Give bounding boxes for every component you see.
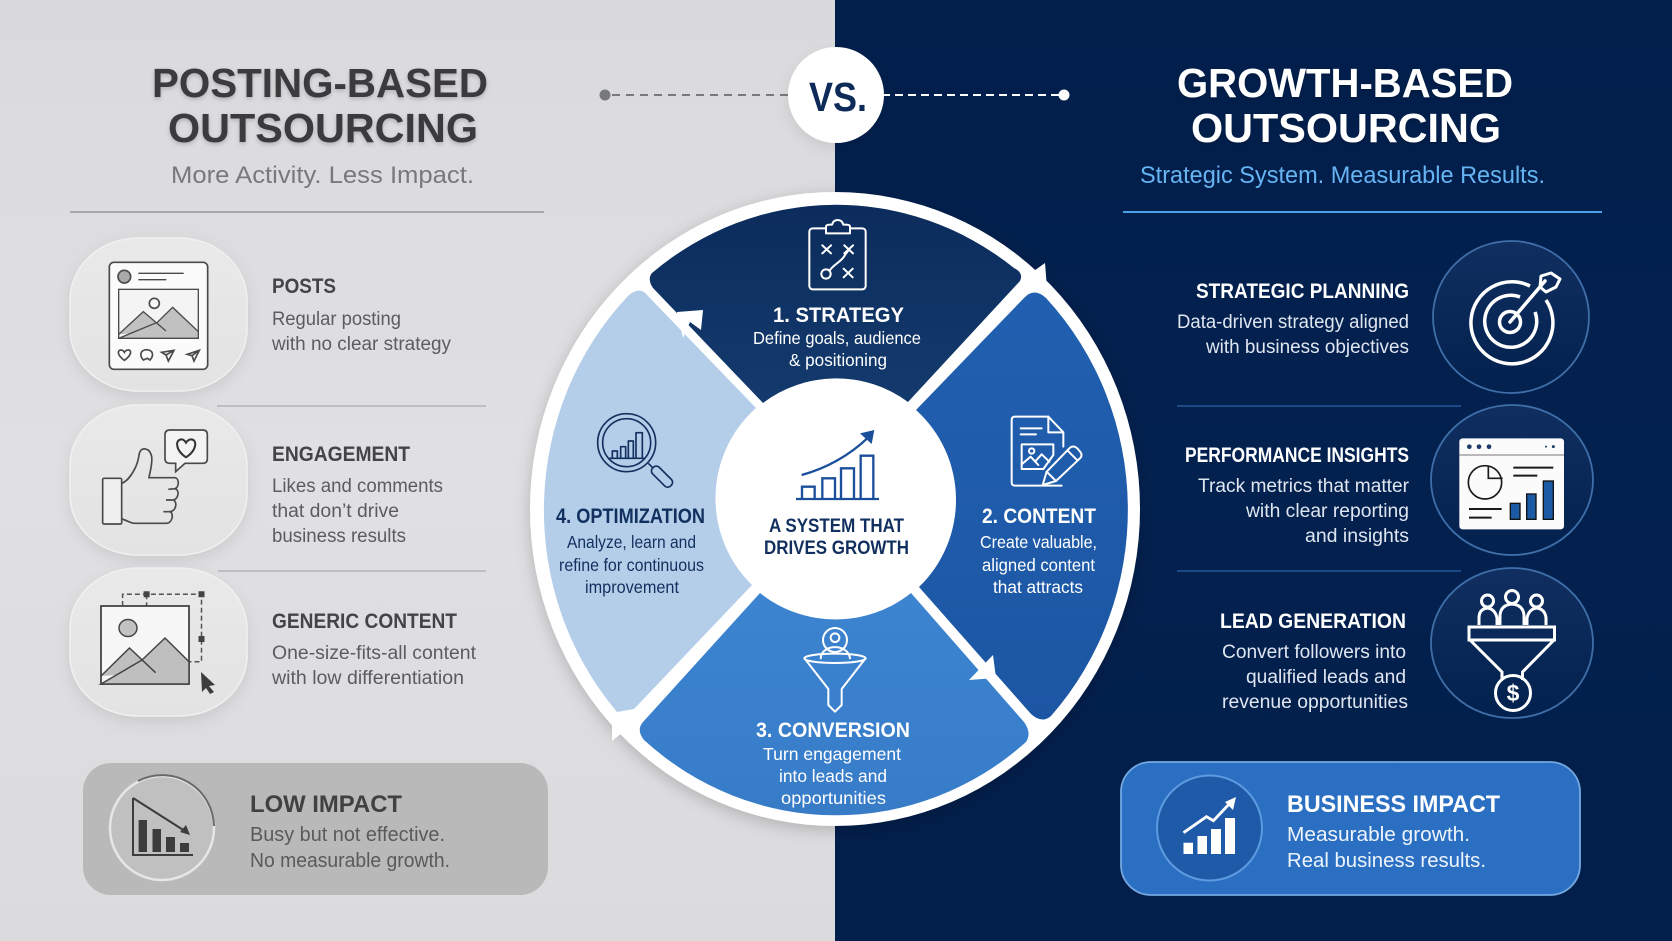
text: performance insights: and insights: [1305, 526, 1409, 547]
text: conversion: [756, 719, 910, 808]
text: conversion: opportunities: [781, 788, 886, 808]
text: performance insights: [1185, 444, 1410, 547]
row: engagement: [70, 405, 443, 555]
heading: growth-based outsourcing: OUTSOURCING: [1191, 105, 1501, 151]
text: optimization: Analyze, learn and: [567, 532, 696, 552]
text: generic content: GENERIC CONTENT: [272, 610, 457, 633]
text: optimization: refine for continuous: [559, 555, 704, 575]
heading: posting-based outsourcing: OUTSOURCING: [168, 105, 478, 151]
text: posts: with no clear strategy: [271, 334, 451, 355]
text: strategic planning: [1177, 280, 1409, 358]
text: conversion: 3. CONVERSION: [756, 719, 910, 742]
arrow: strategy to content: [1024, 263, 1047, 288]
text: lead generation: [1220, 610, 1408, 713]
subtitle: left: More Activity. Less Impact.: [171, 162, 474, 189]
segment: 2 content: [916, 292, 1128, 720]
text: engagement: [272, 443, 443, 547]
text: conversion: Turn engagement: [763, 744, 901, 764]
left panel background: [0, 0, 836, 941]
row: performance insights: [1185, 405, 1593, 555]
text: engagement: business results: [272, 526, 406, 547]
text: a system that drives growth: DRIVES GROWTH: [764, 538, 909, 559]
segment: 1 strategy: [650, 205, 1021, 403]
text: posts: [271, 275, 451, 355]
text: low impact: LOW IMPACT: [250, 791, 402, 818]
text: lead generation: LEAD GENERATION: [1220, 610, 1406, 633]
heading: growth-based outsourcing: [1177, 60, 1513, 151]
text: content: aligned content: [982, 555, 1095, 575]
heading: posting-based outsourcing: POSTING-BASED: [152, 60, 488, 106]
vs connector right: [882, 90, 1070, 100]
text: content: [980, 505, 1097, 597]
text: strategy: [753, 304, 921, 370]
center hub: [718, 382, 954, 618]
arrow: conversion to optimization: [612, 716, 628, 741]
text: strategic planning: STRATEGIC PLANNING: [1196, 280, 1409, 303]
icon: analytics dashboard window: [1431, 405, 1593, 555]
text: content: that attracts: [993, 577, 1083, 597]
text: performance insights: Track metrics that matter: [1198, 476, 1410, 497]
icon: rising bar chart: [1157, 776, 1262, 880]
text: content: Create valuable,: [980, 532, 1097, 552]
text: engagement: ENGAGEMENT: [272, 443, 410, 466]
callout: business impact: [1121, 762, 1580, 895]
icon: thumbs up with heart bubble: [70, 405, 247, 555]
row: posts: [70, 238, 451, 391]
text: optimization: [556, 505, 705, 597]
text: lead generation: qualified leads and: [1246, 667, 1406, 688]
text: engagement: Likes and comments: [272, 476, 443, 497]
circular diagram: system that drives growth: [530, 192, 1140, 826]
arrow: content to conversion: [969, 655, 996, 680]
text: lead generation: Convert followers into: [1222, 642, 1406, 663]
text: a system that drives growth: [764, 516, 909, 559]
icon: social post card: [70, 238, 247, 391]
arrow: optimization to strategy: [677, 310, 703, 338]
text: optimization: 4. OPTIMIZATION: [556, 505, 705, 528]
text: business impact: Measurable growth.: [1287, 824, 1470, 846]
vs connector left: [600, 90, 790, 100]
row: strategic planning: [1177, 241, 1589, 393]
text: strategy: Define goals, audience: [753, 328, 921, 348]
icon: generic image with cursor: [70, 568, 247, 716]
text: a system that drives growth: A SYSTEM THAT: [769, 516, 904, 537]
icon: magnifier with bars: [598, 414, 674, 489]
text: business impact: Real business results.: [1287, 850, 1486, 872]
text: lead generation: revenue opportunities: [1222, 692, 1408, 713]
text: engagement: that don’t drive: [272, 501, 399, 522]
segment: 3 conversion: [640, 593, 1029, 815]
icon: people funnel with dollar: [1431, 568, 1593, 718]
icon: clipboard playbook: [809, 220, 866, 289]
text: content: 2. CONTENT: [982, 505, 1096, 528]
text: business impact: [1287, 791, 1500, 872]
segment: 4 optimization: [544, 290, 756, 712]
text: business impact: BUSINESS IMPACT: [1287, 791, 1500, 818]
text: optimization: improvement: [585, 577, 679, 597]
text: low impact: [250, 791, 450, 872]
icon: growth chart: [796, 430, 879, 499]
vs badge: [788, 47, 884, 143]
icon: people funnel with dollar: $: [1507, 680, 1520, 706]
icon: conversion funnel: [804, 628, 866, 712]
vs badge: VS.: [809, 74, 867, 120]
icon: declining bar chart: [110, 775, 214, 880]
callout: low impact: [83, 763, 548, 895]
icon: target with arrow: [1433, 241, 1589, 393]
text: conversion: into leads and: [779, 766, 887, 786]
text: performance insights: with clear reporting: [1245, 501, 1409, 522]
text: posts: POSTS: [272, 275, 336, 298]
right panel background: [835, 0, 1672, 941]
text: strategic planning: Data-driven strategy aligned: [1177, 312, 1409, 333]
heading: growth-based outsourcing: GROWTH-BASED: [1177, 60, 1513, 106]
row: lead generation: [1220, 568, 1593, 718]
text: strategy: & positioning: [789, 350, 887, 370]
text: low impact: No measurable growth.: [250, 850, 450, 872]
text: strategic planning: with business objectives: [1205, 337, 1409, 358]
text: generic content: [271, 610, 477, 689]
subtitle: right: Strategic System. Measurable Results.: [1140, 162, 1545, 189]
heading: posting-based outsourcing: [152, 60, 488, 151]
icon: document with pencil: [1012, 417, 1082, 486]
text: generic content: One-size-fits-all content: [272, 643, 477, 664]
text: low impact: Busy but not effective.: [250, 824, 445, 846]
text: posts: Regular posting: [272, 309, 401, 330]
text: performance insights: PERFORMANCE INSIGHTS: [1185, 444, 1409, 467]
text: strategy: 1. STRATEGY: [773, 304, 904, 327]
text: generic content: with low differentiation: [271, 668, 464, 689]
row: generic content: [70, 568, 477, 716]
